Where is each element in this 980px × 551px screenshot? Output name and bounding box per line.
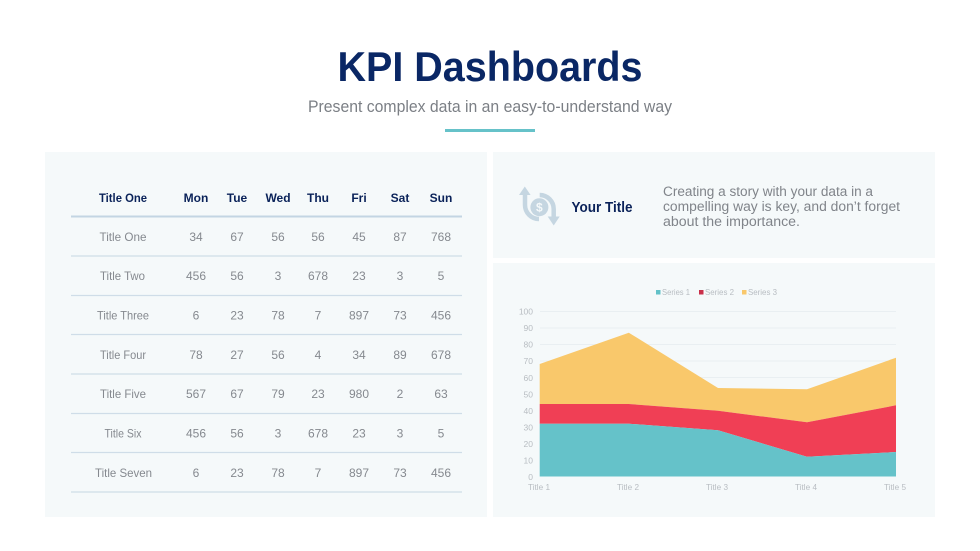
table row: Title Three: 7 (315, 308, 322, 322)
table row: Title Five (100, 387, 448, 401)
table row: Title Seven: 23 (230, 466, 244, 480)
table row: Title Seven: 7 (315, 466, 322, 480)
table row: Title Three: Title Three (97, 308, 149, 322)
callout text: Creating a story with your data in a (663, 184, 873, 199)
table row: Title One: 34 (189, 230, 203, 244)
table row: Title Seven: 78 (271, 466, 285, 480)
y axis labels: 50 (524, 390, 533, 400)
table row: Title One: 87 (393, 230, 407, 244)
area: series 1 (540, 424, 896, 476)
table row: Title Four: Title Four (100, 348, 146, 362)
table row: Title Four: 678 (431, 348, 451, 362)
table header row: Sun (430, 191, 452, 205)
chart legend: Series 3 (748, 288, 778, 297)
table row: Title One: 67 (230, 230, 244, 244)
table row: Title Six: 456 (186, 426, 206, 440)
table row: Title Five: 23 (311, 387, 325, 401)
x axis labels (528, 483, 906, 492)
table row: Title Two: 3 (275, 269, 282, 283)
table row: Title Six: 3 (275, 426, 282, 440)
table header row: Fri (351, 191, 367, 205)
table header row: Tue (227, 191, 248, 205)
table row: Title Two: 23 (352, 269, 366, 283)
table row: Title Two: 56 (230, 269, 244, 283)
area: series 3 (540, 333, 896, 422)
chart legend: Series 1 (662, 288, 691, 297)
table row: Title Two (100, 269, 445, 283)
table row: Title Five: 63 (434, 387, 448, 401)
table header row: Mon (184, 191, 208, 205)
table row: Title Three: 78 (271, 308, 285, 322)
table header row: Title One (99, 191, 147, 205)
y axis labels: 30 (524, 422, 533, 432)
y axis labels: 80 (524, 340, 533, 350)
callout text (663, 184, 900, 229)
y axis labels: 0 (528, 472, 533, 482)
chart legend (656, 288, 778, 297)
table row: Title Three: 456 (431, 308, 451, 322)
table row: Title Five: 67 (230, 387, 244, 401)
table row: Title Five: 2 (397, 387, 404, 401)
table row: Title Three: 23 (230, 308, 244, 322)
table header row (99, 191, 452, 205)
panel: area chart (493, 263, 935, 517)
table row: Title One: 56 (311, 230, 325, 244)
y axis labels: 100 (519, 306, 533, 316)
gridlines (540, 312, 896, 460)
area: series 2 (540, 404, 896, 457)
table row: Title Six: 678 (308, 426, 328, 440)
table row: Title Four: 27 (230, 348, 244, 362)
table row: Title Five: Title Five (100, 387, 146, 401)
table header row: Sat (391, 191, 409, 205)
table row: Title Four (100, 348, 451, 362)
table row: Title Six: 56 (230, 426, 244, 440)
table row: Title Four: 89 (393, 348, 407, 362)
y axis labels: 70 (524, 356, 533, 366)
callout text: about the importance. (663, 214, 800, 229)
x axis labels: Title 1 (528, 483, 550, 492)
table row: Title Seven: 897 (349, 466, 369, 480)
table row: Title Two: Title Two (100, 269, 145, 283)
table row: Title Four: 34 (352, 348, 366, 362)
table row: Title One (100, 230, 451, 244)
x axis labels: Title 5 (884, 483, 906, 492)
table row: Title Five: 567 (186, 387, 206, 401)
title: KPI Dashboards (338, 43, 642, 90)
icon: money exchange arrows: $ (536, 200, 543, 214)
y axis labels: 40 (524, 406, 533, 416)
table row: Title One: 56 (271, 230, 285, 244)
table row: Title One: 768 (431, 230, 451, 244)
table row: Title One: 45 (352, 230, 366, 244)
table row: Title Four: 4 (315, 348, 322, 362)
table row: Title Five: 980 (349, 387, 369, 401)
y axis labels: 20 (524, 439, 533, 449)
x axis labels: Title 2 (617, 483, 639, 492)
panel: table (45, 152, 487, 517)
table row: Title Seven: Title Seven (95, 466, 152, 480)
table row: Title Two: 3 (397, 269, 404, 283)
table row: Title Three (97, 308, 451, 322)
table row: Title Three: 73 (393, 308, 407, 322)
panel: your title callout (493, 152, 935, 258)
table row: Title Seven: 73 (393, 466, 407, 480)
callout text: compelling way is key, and don’t forget (663, 199, 900, 214)
x axis labels: Title 4 (795, 483, 817, 492)
icon: money exchange arrows (519, 186, 560, 226)
table row: Title Four: 56 (271, 348, 285, 362)
table row: Title Six: 5 (438, 426, 445, 440)
table row: Title Six: 3 (397, 426, 404, 440)
table row: Title Six (104, 426, 445, 440)
table header row: Thu (307, 191, 329, 205)
y axis labels: 10 (524, 456, 533, 466)
table row: Title Seven: 456 (431, 466, 451, 480)
table row: Title Four: 78 (189, 348, 203, 362)
chart legend: Series 2 (705, 288, 735, 297)
title accent underline (445, 129, 535, 132)
table row: Title Seven: 6 (193, 466, 200, 480)
table row: Title Two: 5 (438, 269, 445, 283)
table row: Title Three: 897 (349, 308, 369, 322)
table header row: Wed (265, 191, 291, 205)
table row: Title One: Title One (100, 230, 147, 244)
table row: Title Three: 6 (193, 308, 200, 322)
subtitle: Present complex data in an easy-to-understand way (308, 98, 673, 116)
y axis labels: 60 (524, 373, 533, 383)
table row: Title Six: Title Six (104, 426, 142, 440)
x axis labels: Title 3 (706, 483, 728, 492)
table row: Title Two: 456 (186, 269, 206, 283)
table row: Title Two: 678 (308, 269, 328, 283)
table row: Title Seven (95, 466, 451, 480)
table row: Title Five: 79 (271, 387, 285, 401)
callout heading: Your Title (572, 200, 632, 216)
y axis labels (519, 306, 533, 482)
y axis labels: 90 (524, 323, 533, 333)
table row: Title Six: 23 (352, 426, 366, 440)
